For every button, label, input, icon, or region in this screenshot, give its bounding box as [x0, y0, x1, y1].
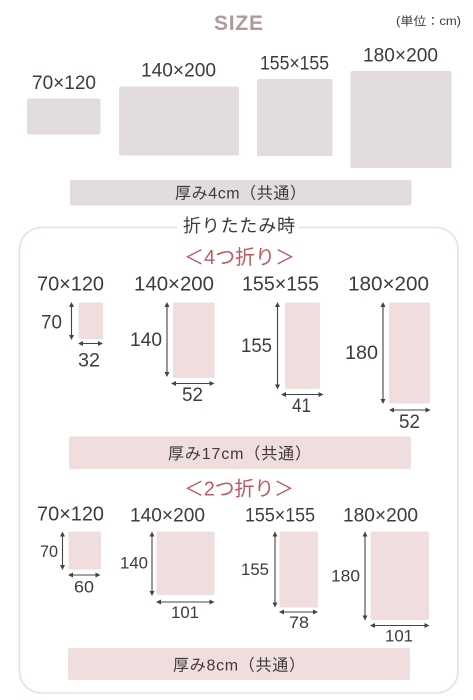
2-fold 180x200: 101	[385, 626, 413, 646]
2-fold 155x155	[241, 506, 318, 632]
4-fold 180x200	[345, 274, 430, 433]
2-fold 70x120: 60	[74, 578, 94, 596]
4-fold 140x200: 140	[130, 330, 162, 351]
thickness bar: 17cm	[69, 436, 411, 469]
4-fold 140x200	[130, 274, 214, 406]
thickness bar: 8cm	[68, 648, 410, 680]
size 180x200	[350, 46, 452, 168]
2-fold 140x200: 140	[120, 554, 148, 572]
thickness bar: 4cm	[70, 180, 412, 206]
panel heading: 折りたたみ時	[183, 216, 295, 236]
2-fold 70x120: 70×120	[37, 504, 104, 526]
size 140x200: 140×200	[141, 60, 216, 82]
panel: folded sizes	[20, 216, 458, 693]
2-fold 180x200: 180	[331, 566, 360, 586]
2-fold 70x120	[37, 504, 104, 596]
2-fold 155x155: 155	[241, 560, 269, 579]
size 155x155: 155×155	[260, 54, 329, 74]
2-fold 140x200	[120, 506, 214, 622]
title: SIZE	[214, 12, 263, 35]
4-fold 140x200: 140×200	[134, 274, 214, 296]
2-fold 140x200: 140×200	[130, 506, 205, 526]
2-fold 155x155: 155×155	[245, 506, 315, 526]
unit note: (単位：cm)	[396, 14, 461, 28]
4-fold 155x155: 155	[241, 336, 272, 357]
4-fold 70x120: 70	[41, 312, 62, 334]
4-fold 155x155: 155×155	[242, 274, 319, 296]
size 70x120: 70×120	[32, 73, 96, 94]
size 140x200	[119, 60, 239, 156]
thickness bar: 17cm: 厚み17cm（共通）	[168, 445, 311, 463]
thickness bar: 8cm: 厚み8cm（共通）	[173, 656, 305, 674]
heading: 2-fold: ＜2つ折り＞	[184, 478, 294, 500]
4-fold 155x155	[241, 274, 324, 417]
4-fold 70x120	[37, 274, 104, 372]
heading: 4-fold: ＜4つ折り＞	[184, 246, 295, 269]
4-fold 180x200: 180×200	[348, 274, 429, 296]
thickness bar: 4cm: 厚み4cm（共通）	[175, 184, 306, 202]
2-fold 140x200: 101	[171, 603, 199, 622]
4-fold 140x200: 52	[182, 385, 203, 406]
2-fold 180x200	[331, 506, 430, 646]
4-fold 180x200: 180	[345, 343, 378, 364]
size 180x200: 180×200	[363, 46, 438, 66]
4-fold 70x120: 70×120	[37, 274, 104, 296]
4-fold 180x200: 52	[399, 412, 420, 433]
4-fold 155x155: 41	[292, 396, 311, 417]
size 70x120	[27, 73, 100, 134]
2-fold 180x200: 180×200	[343, 506, 418, 526]
size 155x155	[257, 54, 332, 156]
2-fold 155x155: 78	[289, 613, 309, 632]
4-fold 70x120: 32	[78, 350, 100, 372]
2-fold 70x120: 70	[40, 542, 58, 561]
